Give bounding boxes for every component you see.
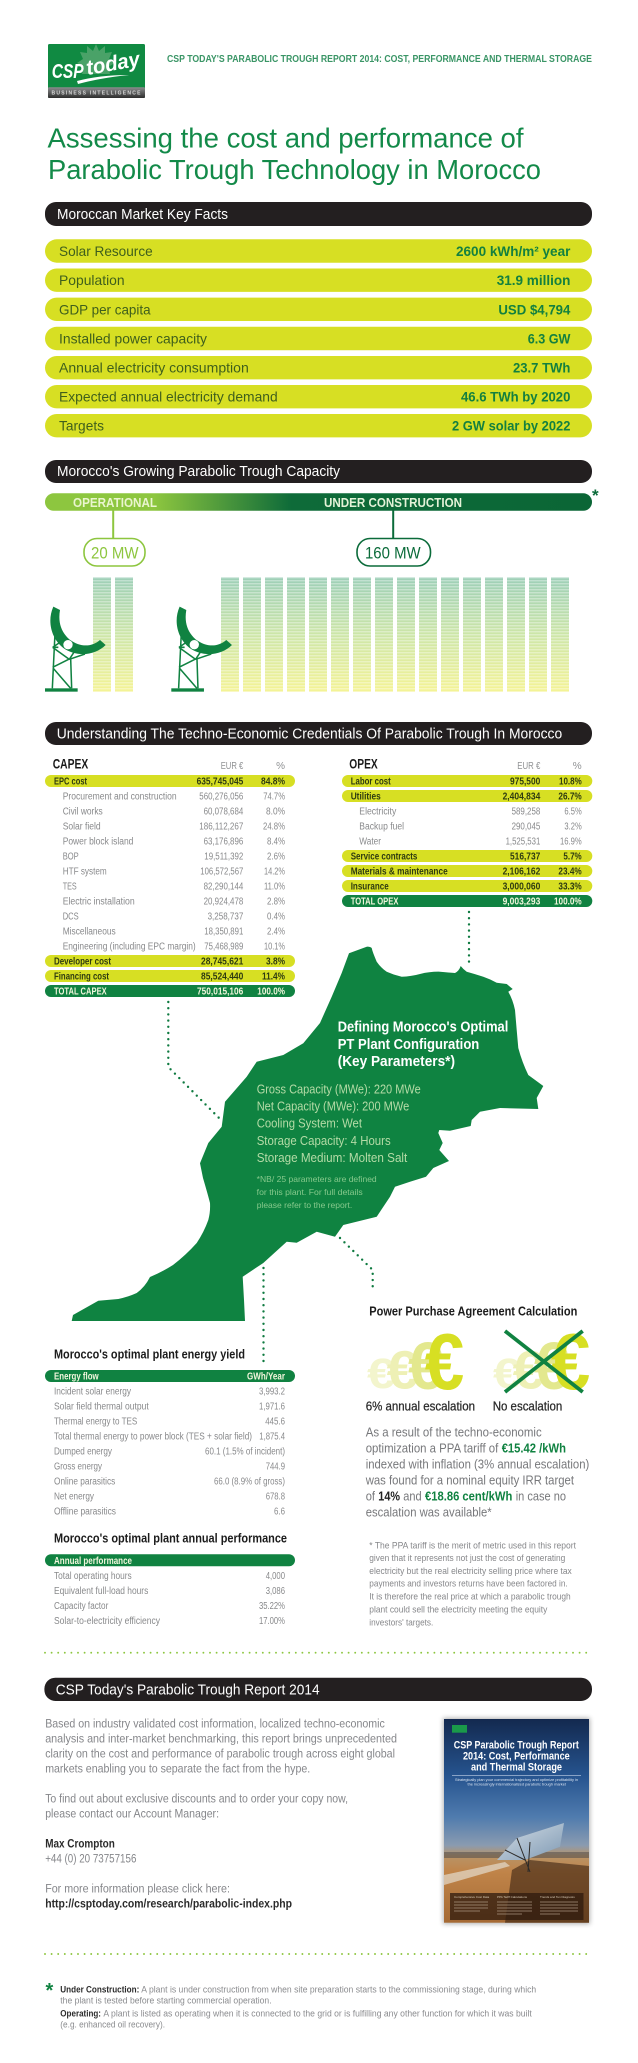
map: Morocco with key parameters	[72, 947, 543, 1321]
map parameters list: Gross Capacity (MWe): 220 MWe	[257, 1082, 421, 1096]
text: report description: Based on industry validated cost information, localized techno-economic	[45, 1717, 385, 1731]
row: EPC cost: 635,745,045	[197, 776, 244, 788]
text: report description: please contact our Account Manager:	[45, 1807, 219, 1821]
heading: energy yield: Morocco's optimal plant energy yield	[54, 1346, 245, 1361]
rows: utilities breakdown: Backup fuel	[359, 822, 404, 832]
rows: EPC cost breakdown: 8.4%	[267, 836, 285, 848]
text: PPA result paragraph: escalation was available*	[366, 1505, 492, 1520]
text: contact details	[45, 1837, 292, 1911]
icon: euros with 6% annual escalation: €	[425, 1317, 464, 1406]
rows: utilities breakdown: Electricity	[359, 806, 396, 818]
fact: expected annual electricity demand: 46.6 TWh by 2020	[461, 389, 571, 405]
rows: energy flow values: Dumped energy	[54, 1446, 112, 1458]
row: utilities	[342, 790, 592, 802]
text: report description: markets enabling you to separate the fact from the hype.	[45, 1762, 310, 1776]
cover mirror	[497, 1823, 564, 1872]
text: definitions footnote: Operating:	[60, 2009, 101, 2020]
rows: EPC cost breakdown: 14.2%	[264, 866, 285, 878]
map note: *NB/ 25 parameters are defined	[257, 1174, 377, 1184]
icon: crossed-out euros, no escalation: €	[513, 1340, 544, 1400]
cover info panel: Comprehensive Cost Data	[454, 1895, 490, 1899]
row: EPC cost	[45, 775, 295, 788]
row: utilities: Utilities	[351, 792, 381, 802]
rows: EPC cost breakdown: 0.4%	[267, 912, 285, 922]
rows: EPC cost breakdown: 19,511,392	[204, 852, 244, 862]
row: materials and maintenance: 23.4%	[558, 866, 582, 878]
row: financing cost	[45, 970, 295, 982]
fact: GDP per capita	[45, 298, 592, 321]
rows: energy flow values: 1,875.4	[259, 1432, 285, 1442]
map heading: (Key Parameters*)	[338, 1054, 455, 1070]
text: PPA result paragraph: €15.42 /kWh	[502, 1441, 566, 1456]
row: EPC cost: 84.8%	[261, 776, 285, 788]
rows: energy flow values: 6.6	[274, 1506, 285, 1518]
icon: euros with 6% annual escalation: €	[408, 1329, 443, 1404]
cover subtitle	[455, 1778, 578, 1786]
text: PPA result paragraph: indexed with inflation (3% annual escalation)	[366, 1457, 589, 1472]
rows: annual performance values: Equivalent full-load hours	[54, 1586, 148, 1597]
rows: EPC cost breakdown: 11.0%	[264, 882, 285, 892]
label: no escalation: No escalation	[493, 1400, 562, 1414]
rows: EPC cost breakdown: 2.6%	[267, 852, 285, 862]
rows: EPC cost breakdown: 2.4%	[267, 926, 285, 938]
fact: installed power capacity: Installed power capacity	[59, 330, 207, 346]
fact: GDP per capita: USD $4,794	[498, 301, 571, 317]
rows: annual performance values: Capacity factor	[54, 1601, 109, 1612]
status bar: operational to under construction: OPERATIONAL	[73, 496, 157, 510]
callout: 160 MW: 160 MW	[365, 543, 421, 562]
rows: energy flow values: Thermal energy to TES	[54, 1416, 138, 1428]
text: PPA footnote	[369, 1540, 576, 1627]
section heading: Moroccan Market Key Facts: Moroccan Market Key Facts	[57, 206, 228, 223]
text: PPA result paragraph: €18.86 cent/kWh	[425, 1489, 512, 1504]
icon: crossed-out euros, no escalation: €	[551, 1317, 590, 1406]
text: PPA footnote: plant could sell the electricity meeting the equity	[369, 1605, 548, 1615]
connector: dotted leaders	[168, 912, 469, 1361]
icon: parabolic trough 2	[171, 607, 232, 692]
row: total OPEX	[342, 895, 592, 908]
cover title	[454, 1739, 579, 1773]
text: report description: analysis and inter-market benchmarking, this report brings unprecedented	[45, 1732, 397, 1746]
table: annual performance	[45, 1554, 295, 1627]
section heading: Moroccan Market Key Facts	[45, 202, 592, 226]
row: developer cost	[45, 955, 295, 968]
text: definitions footnote	[60, 1984, 536, 2031]
rows: annual performance values	[54, 1571, 285, 1627]
rows: energy flow values: Total thermal energy to power block (TES + solar field)	[54, 1432, 252, 1442]
text: report description	[45, 1717, 397, 1821]
row: materials and maintenance: 2,106,162	[503, 866, 541, 878]
rows: EPC cost breakdown: Miscellaneous	[63, 926, 116, 938]
fact: population: Population	[59, 272, 125, 288]
section heading: Morocco's Growing Parabolic Trough Capacity: Morocco's Growing Parabolic Trough Capacity	[57, 463, 340, 480]
rows: EPC cost breakdown: 560,276,056	[199, 792, 244, 802]
table: CAPEX: %	[276, 761, 285, 772]
text: definitions footnote: Under Construction:	[60, 1984, 139, 1995]
row: labor cost: Labor cost	[351, 776, 391, 788]
table: energy yield: Energy flow	[54, 1372, 99, 1383]
rows: energy flow values: Gross energy	[54, 1462, 102, 1472]
status bar: operational to under construction	[45, 493, 592, 511]
text: contact details: For more information please click here:	[45, 1882, 230, 1896]
rows: EPC cost breakdown: 106,572,567	[200, 866, 244, 878]
section heading: CSP Today's Parabolic Trough Report 2014: CSP Today's Parabolic Trough Report 2014	[56, 1682, 320, 1698]
title: Parabolic Trough Technology in Morocco	[48, 154, 541, 185]
rows: EPC cost breakdown: Solar field	[63, 822, 101, 832]
table: CAPEX: CAPEX	[53, 756, 88, 772]
fact: solar resource: 2600 kWh/m² year	[456, 243, 571, 259]
rows: EPC cost breakdown: DCS	[63, 912, 79, 922]
rows: energy flow values: 445.6	[265, 1416, 285, 1428]
icon: parabolic trough 1	[45, 607, 106, 692]
rows: utilities breakdown: 6.5%	[564, 806, 582, 818]
row: developer cost: 3.8%	[266, 956, 285, 968]
rows: EPC cost breakdown: 10.1%	[264, 942, 285, 952]
row: insurance: 33.3%	[558, 882, 582, 892]
rows: EPC cost breakdown: Procurement and construction	[63, 792, 177, 802]
map parameters list: Storage Medium: Molten Salt	[257, 1151, 408, 1165]
rows: EPC cost breakdown: 186,112,267	[199, 822, 244, 832]
callout: 20 MW	[84, 510, 145, 566]
fact: population: 31.9 million	[497, 272, 570, 288]
text: definitions footnote: (e.g. enhanced oil recovery).	[60, 2020, 165, 2031]
fact: installed power capacity	[45, 327, 592, 350]
icon: euros with 6% annual escalation: €	[387, 1340, 418, 1400]
map heading	[338, 1020, 508, 1070]
row: utilities: 26.7%	[558, 792, 582, 802]
text: PPA footnote: investors' targets.	[369, 1617, 433, 1627]
text: PPA result paragraph: As a result of the techno-economic	[366, 1425, 542, 1440]
fact: population	[45, 268, 592, 292]
fact: targets	[45, 414, 592, 437]
icon: euros with 6% annual escalation	[367, 1317, 464, 1406]
table: OPEX: %	[573, 761, 582, 772]
heading: annual performance: Morocco's optimal plant annual performance	[54, 1531, 287, 1546]
rows: energy flow values: Solar field thermal output	[54, 1402, 149, 1412]
title: Assessing the cost and performance of	[48, 122, 524, 154]
map parameters list	[257, 1082, 421, 1165]
map heading: Defining Morocco's Optimal	[338, 1020, 508, 1036]
callout: 20 MW: 20 MW	[91, 543, 138, 562]
rows: EPC cost breakdown: 63,176,896	[204, 836, 244, 848]
fact: annual electricity consumption	[45, 356, 592, 379]
text: PPA result paragraph: optimization a PPA tariff of	[366, 1441, 499, 1456]
rows: energy flow values: 744.9	[266, 1462, 285, 1472]
fact: targets: Targets	[59, 418, 104, 434]
table: energy yield: GWh/Year	[247, 1372, 285, 1383]
cover info panel	[450, 1893, 584, 1920]
table: OPEX: EUR €	[517, 761, 541, 772]
row: service contracts	[342, 850, 592, 862]
panel: key facts list	[45, 239, 592, 437]
fact: targets: 2 GW solar by 2022	[452, 418, 571, 434]
text: PPA footnote: * The PPA tariff is the merit of metric used in this report	[369, 1540, 576, 1550]
cover info panel: PPA Tariff Calculations	[497, 1895, 528, 1899]
report cover image	[443, 1718, 590, 1924]
text: PPA footnote: electricity but the real electricity selling price where tax	[369, 1566, 572, 1576]
text: contact details: +44 (0) 20 73757156	[45, 1852, 137, 1866]
logo: CSP Today Business Intelligence: BUSINESS INTELLIGENCE	[52, 90, 141, 96]
asterisk marker: footnote: *	[46, 1980, 54, 2002]
text: PPA result paragraph: and	[403, 1489, 422, 1504]
rows: EPC cost breakdown: HTF system	[63, 866, 107, 878]
section heading: Morocco's Growing Parabolic Trough Capacity	[45, 460, 592, 483]
cover subtitle: Strategically plan your commercial trajectory and optimize profitability in	[455, 1778, 578, 1782]
text: contact details: http://csptoday.com/research/parabolic-index.php	[45, 1897, 292, 1911]
rows: EPC cost breakdown: Electric installation	[63, 896, 135, 908]
icon: crossed-out euros, no escalation: €	[493, 1350, 521, 1398]
row: insurance	[342, 880, 592, 892]
status bar: operational to under construction: UNDER CONSTRUCTION	[324, 496, 462, 510]
row: labor cost: 10.8%	[559, 776, 582, 788]
cover title: 2014: Cost, Performance	[463, 1750, 570, 1762]
row: developer cost: 28,745,621	[201, 956, 244, 968]
text: definitions footnote: the plant is tested before starting commercial operation.	[60, 1995, 272, 2006]
rows: energy flow values: 3,993.2	[259, 1386, 285, 1398]
map heading: PT Plant Configuration	[338, 1037, 479, 1053]
row: materials and maintenance	[342, 865, 592, 878]
row: labor cost	[342, 775, 592, 788]
row: financing cost: Financing cost	[54, 972, 110, 982]
table: energy yield	[45, 1370, 295, 1518]
text: contact details: Max Crompton	[45, 1837, 115, 1851]
icon: crossed-out euros, no escalation: €	[534, 1329, 569, 1404]
fact: installed power capacity: 6.3 GW	[528, 330, 571, 346]
text: PPA footnote: It is therefore the real price at which a parabolic trough	[369, 1592, 571, 1602]
rows: EPC cost breakdown: Engineering (including EPC margin)	[63, 942, 196, 952]
row: insurance: Insurance	[351, 882, 389, 892]
rows: EPC cost breakdown	[63, 792, 285, 952]
row: developer cost: Developer cost	[54, 956, 112, 968]
rows: energy flow values: 66.0 (8.9% of gross)	[214, 1476, 285, 1488]
title	[48, 122, 541, 185]
text: PPA result paragraph: 14%	[378, 1489, 400, 1504]
rows: EPC cost breakdown: 3,258,737	[208, 912, 244, 922]
row: total CAPEX: TOTAL CAPEX	[54, 986, 107, 998]
row: labor cost: 975,500	[510, 776, 541, 788]
chart: under construction capacity bars	[221, 577, 569, 692]
rows: annual performance values: 3,086	[266, 1586, 285, 1597]
cover title: CSP Parabolic Trough Report	[454, 1739, 579, 1751]
text: report description: clarity on the cost and performance of parabolic trough across eight global	[45, 1747, 395, 1761]
text: PPA result paragraph: of	[366, 1489, 375, 1504]
heading: power purchase agreement: Power Purchase Agreement Calculation	[369, 1304, 577, 1319]
rows: energy flow values: Online parasitics	[54, 1476, 115, 1488]
text: PPA footnote: given that it represents not just the cost of generating	[369, 1553, 565, 1563]
map note	[257, 1174, 377, 1210]
asterisk marker: *	[592, 486, 599, 505]
rows: EPC cost breakdown: 60,078,684	[204, 806, 244, 818]
rows: utilities breakdown: 290,045	[512, 822, 541, 832]
rows: energy flow values: Net energy	[54, 1492, 94, 1502]
label: 6% annual escalation: 6% annual escalation	[366, 1400, 475, 1414]
map parameters list: Cooling System: Wet	[257, 1117, 362, 1131]
icon: euros with 6% annual escalation: €	[367, 1350, 395, 1398]
row: total CAPEX: 750,015,106	[197, 986, 244, 998]
text: definitions footnote: A plant is listed as operating when it is connected to the grid or is fulfilling any other function for which it was built	[103, 2009, 532, 2020]
icon: crossed-out euros, no escalation	[493, 1317, 590, 1406]
row: financing cost: 85,524,440	[201, 972, 244, 982]
rows: EPC cost breakdown: 74.7%	[263, 792, 285, 802]
rows: annual performance values: Total operating hours	[54, 1571, 132, 1582]
rows: EPC cost breakdown: TES	[63, 882, 77, 892]
text: PPA result paragraph: in case no	[516, 1489, 566, 1504]
callout: 160 MW	[357, 510, 430, 566]
fact: GDP per capita: GDP per capita	[59, 301, 151, 317]
rows: utilities breakdown: 16.9%	[560, 836, 582, 848]
rows: energy flow values	[54, 1386, 285, 1518]
rows: utilities breakdown: 1,525,531	[506, 836, 541, 848]
text: report description: To find out about exclusive discounts and to order your copy now,	[45, 1792, 348, 1806]
rows: annual performance values: Solar-to-electricity efficiency	[54, 1616, 160, 1627]
rows: energy flow values: 60.1 (1.5% of incident)	[205, 1446, 285, 1458]
row: materials and maintenance: Materials & maintenance	[351, 866, 448, 878]
fact: expected annual electricity demand	[45, 385, 592, 408]
rows: EPC cost breakdown: 20,924,478	[204, 896, 244, 908]
cover title: and Thermal Storage	[471, 1761, 562, 1773]
map note: for this plant. For full details	[257, 1187, 363, 1197]
map parameters list: Net Capacity (MWe): 200 MWe	[257, 1100, 409, 1114]
row: service contracts: 516,737	[510, 852, 541, 862]
text: PPA result paragraph	[365, 1425, 589, 1520]
table: annual performance: Annual performance	[54, 1556, 132, 1567]
rows: EPC cost breakdown: 75,468,989	[204, 942, 244, 952]
row: financing cost: 11.4%	[262, 972, 285, 982]
row: total OPEX: 9,003,293	[503, 896, 541, 908]
row: total CAPEX: 100.0%	[257, 986, 285, 998]
rows: EPC cost breakdown: 2.8%	[267, 896, 285, 908]
rows: EPC cost breakdown: BOP	[63, 852, 79, 862]
row: utilities: 2,404,834	[503, 792, 541, 802]
fact: solar resource	[45, 239, 592, 263]
cover subtitle: the increasingly internationalized parabolic trough market	[468, 1782, 566, 1786]
rows: EPC cost breakdown: Power block island	[63, 836, 133, 848]
rows: utilities breakdown	[359, 806, 582, 848]
table: OPEX	[342, 756, 592, 908]
rows: EPC cost breakdown: 8.0%	[266, 806, 285, 818]
fact: solar resource: Solar Resource	[59, 243, 153, 259]
map note: please refer to the report.	[257, 1200, 352, 1210]
fact: annual electricity consumption: 23.7 TWh	[513, 360, 570, 376]
row: total OPEX: TOTAL OPEX	[351, 896, 399, 908]
logo: CSP Today Business Intelligence	[48, 44, 145, 98]
rows: energy flow values: 678.8	[266, 1492, 285, 1502]
row: service contracts: 5.7%	[563, 852, 582, 862]
map parameters list: Storage Capacity: 4 Hours	[257, 1134, 391, 1148]
text: PPA result paragraph: was found for a nominal equity IRR target	[365, 1473, 574, 1488]
rows: EPC cost breakdown: 24.8%	[263, 822, 285, 832]
rows: energy flow values: 1,971.6	[259, 1402, 285, 1412]
cover info panel: Trends and Ten Diagnosis	[540, 1895, 575, 1899]
rows: EPC cost breakdown: Civil works	[63, 806, 103, 818]
rows: annual performance values: 17.00%	[259, 1616, 285, 1627]
section heading: CSP Today's Parabolic Trough Report 2014	[44, 1678, 592, 1701]
table: OPEX: OPEX	[349, 756, 378, 772]
table: CAPEX	[45, 756, 295, 998]
text: PPA footnote: payments and investors returns have been factored in.	[369, 1579, 568, 1589]
rows: energy flow values: Offline parasitics	[54, 1506, 116, 1518]
row: EPC cost: EPC cost	[54, 776, 87, 788]
row: total OPEX: 100.0%	[554, 896, 582, 908]
fact: annual electricity consumption: Annual electricity consumption	[59, 360, 249, 376]
section heading: Understanding The Techno-Economic Credentials: Understanding The Techno-Economic Credentials Of Parabolic Trough In Morocco	[57, 726, 562, 742]
row: total CAPEX	[45, 985, 295, 998]
fact: expected annual electricity demand: Expected annual electricity demand	[59, 389, 278, 405]
rows: utilities breakdown: 589,258	[512, 806, 541, 818]
rows: EPC cost breakdown: 18,350,891	[204, 926, 244, 938]
rows: utilities breakdown: 3.2%	[564, 822, 582, 832]
logo: CSP Today Business Intelligence: CSP	[52, 61, 84, 83]
rows: EPC cost breakdown: 82,290,144	[204, 882, 244, 892]
row: service contracts: Service contracts	[351, 852, 418, 862]
row: insurance: 3,000,060	[503, 882, 541, 892]
logo: CSP Today Business Intelligence: today	[84, 48, 143, 80]
rows: utilities breakdown: Water	[359, 836, 382, 848]
chart: operational capacity bars	[93, 577, 133, 692]
cover ground shadow	[505, 1860, 589, 1923]
rows: annual performance values: 4,000	[266, 1571, 285, 1582]
rows: energy flow values: Incident solar energy	[54, 1386, 131, 1398]
rows: annual performance values: 35.22%	[259, 1601, 285, 1612]
cover logo	[452, 1725, 467, 1733]
text: definitions footnote: A plant is under construction from when site preparation starts to the commissioning stage, during which	[141, 1984, 536, 1995]
table: CAPEX: EUR €	[221, 761, 244, 772]
